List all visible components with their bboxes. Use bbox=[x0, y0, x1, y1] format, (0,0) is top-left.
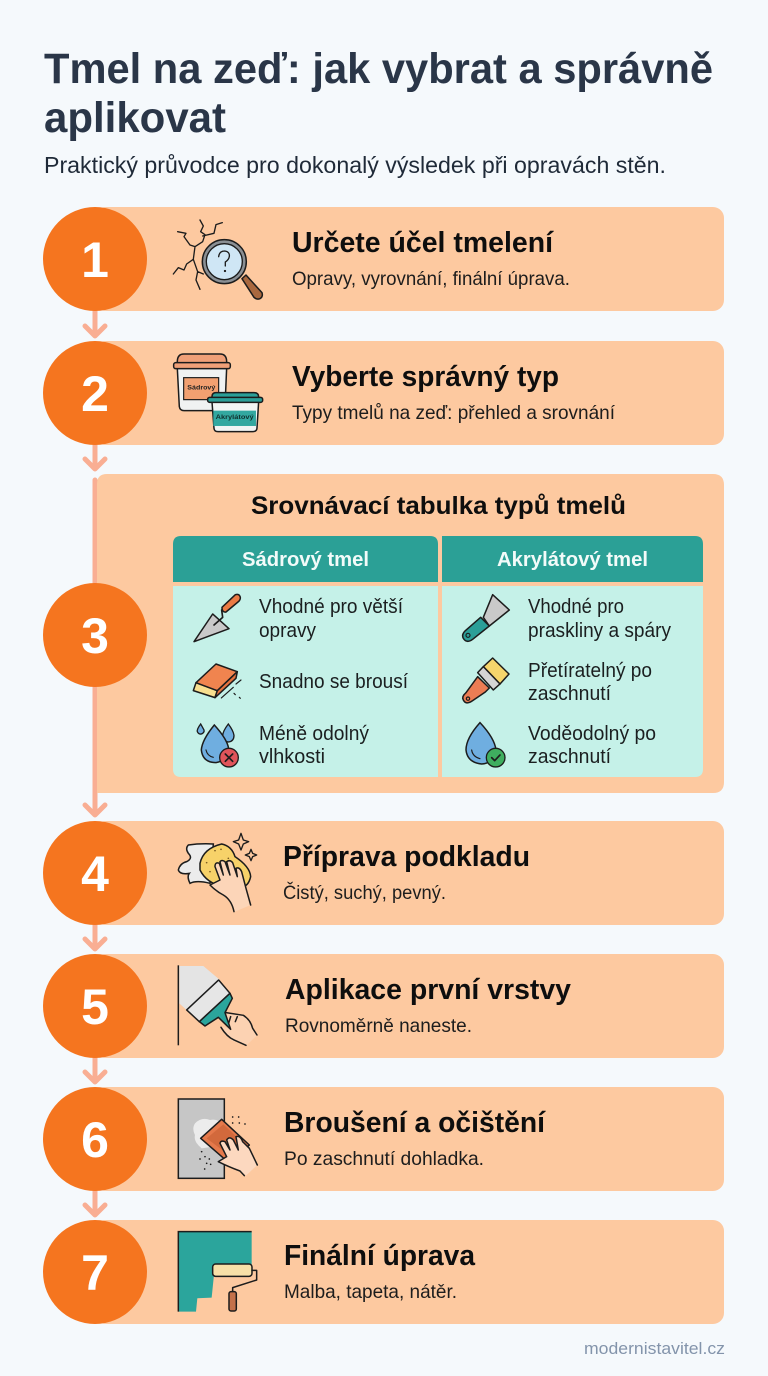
text: Voděodolný po bbox=[528, 723, 656, 745]
panel: step 3 comparison table bbox=[43, 474, 724, 793]
number badge 3 bbox=[43, 583, 147, 687]
text: praskliny a spáry bbox=[528, 620, 671, 642]
arrow: step 4 to 5 bbox=[85, 925, 105, 949]
panel: step 2 bbox=[43, 341, 724, 445]
text: zaschnutí bbox=[528, 683, 611, 705]
table heading: Srovnávací tabulka typů tmelů bbox=[251, 492, 626, 520]
panel: step 5 bbox=[43, 954, 724, 1058]
number badge 4: 4 bbox=[81, 846, 109, 902]
number badge 3: 3 bbox=[81, 608, 109, 664]
arrow: step 2 to 3 bbox=[85, 445, 105, 469]
description: Opravy, vyrovnání, finální úprava. bbox=[292, 268, 570, 290]
column header: Akrylátový tmel bbox=[497, 549, 648, 571]
arrow: step 5 to 6 bbox=[85, 1058, 105, 1082]
description: Po zaschnutí dohladka. bbox=[284, 1148, 484, 1170]
icon: two tubs of filler: Sádrový bbox=[187, 385, 216, 392]
icon: crack and magnifier bbox=[173, 220, 262, 299]
number badge 6: 6 bbox=[81, 1112, 109, 1168]
number badge 7 bbox=[43, 1220, 147, 1324]
icon: sanding wall bbox=[178, 1099, 257, 1178]
number badge 2: 2 bbox=[81, 366, 109, 422]
number badge 1 bbox=[43, 207, 147, 311]
number badge 5: 5 bbox=[81, 979, 109, 1035]
heading: Finální úprava bbox=[284, 1240, 476, 1272]
description: Čistý, suchý, pevný. bbox=[283, 881, 446, 904]
title: Tmel na zeď: jak vybrat a správně bbox=[44, 45, 713, 93]
icon: water drop with check bbox=[466, 723, 505, 767]
text: opravy bbox=[259, 620, 316, 642]
icon: water drops with cross bbox=[197, 724, 238, 767]
text: Vhodné pro bbox=[528, 596, 624, 618]
heading: Příprava podkladu bbox=[283, 841, 530, 873]
number badge 4 bbox=[43, 821, 147, 925]
arrow: step 1 to 2 bbox=[85, 311, 105, 336]
icon: paintbrush bbox=[463, 658, 509, 703]
title bbox=[44, 45, 713, 142]
footer source: modernistavitel.cz bbox=[584, 1339, 725, 1358]
column header: Sádrový tmel bbox=[242, 549, 369, 571]
text: Přetíratelný po bbox=[528, 660, 652, 682]
subtitle: Praktický průvodce pro dokonalý výsledek při opravách stěn. bbox=[44, 152, 666, 178]
description: Malba, tapeta, nátěr. bbox=[284, 1281, 457, 1303]
column: Akrylátový tmel bbox=[442, 536, 703, 777]
icon: spatula on wall bbox=[178, 965, 257, 1045]
text: Méně odolný bbox=[259, 723, 369, 745]
text: Snadno se brousí bbox=[259, 671, 408, 693]
icon: two tubs of filler bbox=[174, 354, 263, 432]
description: Rovnoměrně naneste. bbox=[285, 1015, 472, 1037]
heading: Aplikace první vrstvy bbox=[285, 974, 571, 1006]
number badge 1: 1 bbox=[81, 232, 109, 288]
number badge 2 bbox=[43, 341, 147, 445]
number badge 6 bbox=[43, 1087, 147, 1191]
description: Typy tmelů na zeď: přehled a srovnání bbox=[292, 402, 616, 424]
column: Sádrový tmel bbox=[173, 536, 438, 777]
text: zaschnutí bbox=[528, 746, 611, 768]
arrow: step 6 to 7 bbox=[85, 1191, 105, 1215]
arrow: step 3 to 4 bbox=[85, 480, 105, 815]
number badge 5 bbox=[43, 954, 147, 1058]
panel: step 1 bbox=[43, 207, 724, 311]
icon: two tubs of filler: Akrylátový bbox=[216, 415, 254, 421]
title: aplikovat bbox=[44, 94, 226, 142]
icon: trowel bbox=[194, 594, 240, 642]
icon: sanding block bbox=[193, 664, 241, 698]
text: vlhkosti bbox=[259, 746, 325, 768]
panel: step 6 bbox=[43, 1087, 724, 1191]
panel: step 4 bbox=[43, 821, 724, 925]
icon: sponge and hand bbox=[178, 833, 257, 912]
heading: Broušení a očištění bbox=[284, 1107, 546, 1139]
panel: step 7 bbox=[43, 1220, 724, 1324]
number badge 7: 7 bbox=[81, 1245, 109, 1301]
icon: paint roller bbox=[178, 1232, 257, 1312]
heading: Vyberte správný typ bbox=[292, 361, 559, 393]
text: Vhodné pro větší bbox=[259, 596, 403, 618]
heading: Určete účel tmelení bbox=[292, 227, 554, 259]
icon: putty knife bbox=[463, 595, 509, 641]
